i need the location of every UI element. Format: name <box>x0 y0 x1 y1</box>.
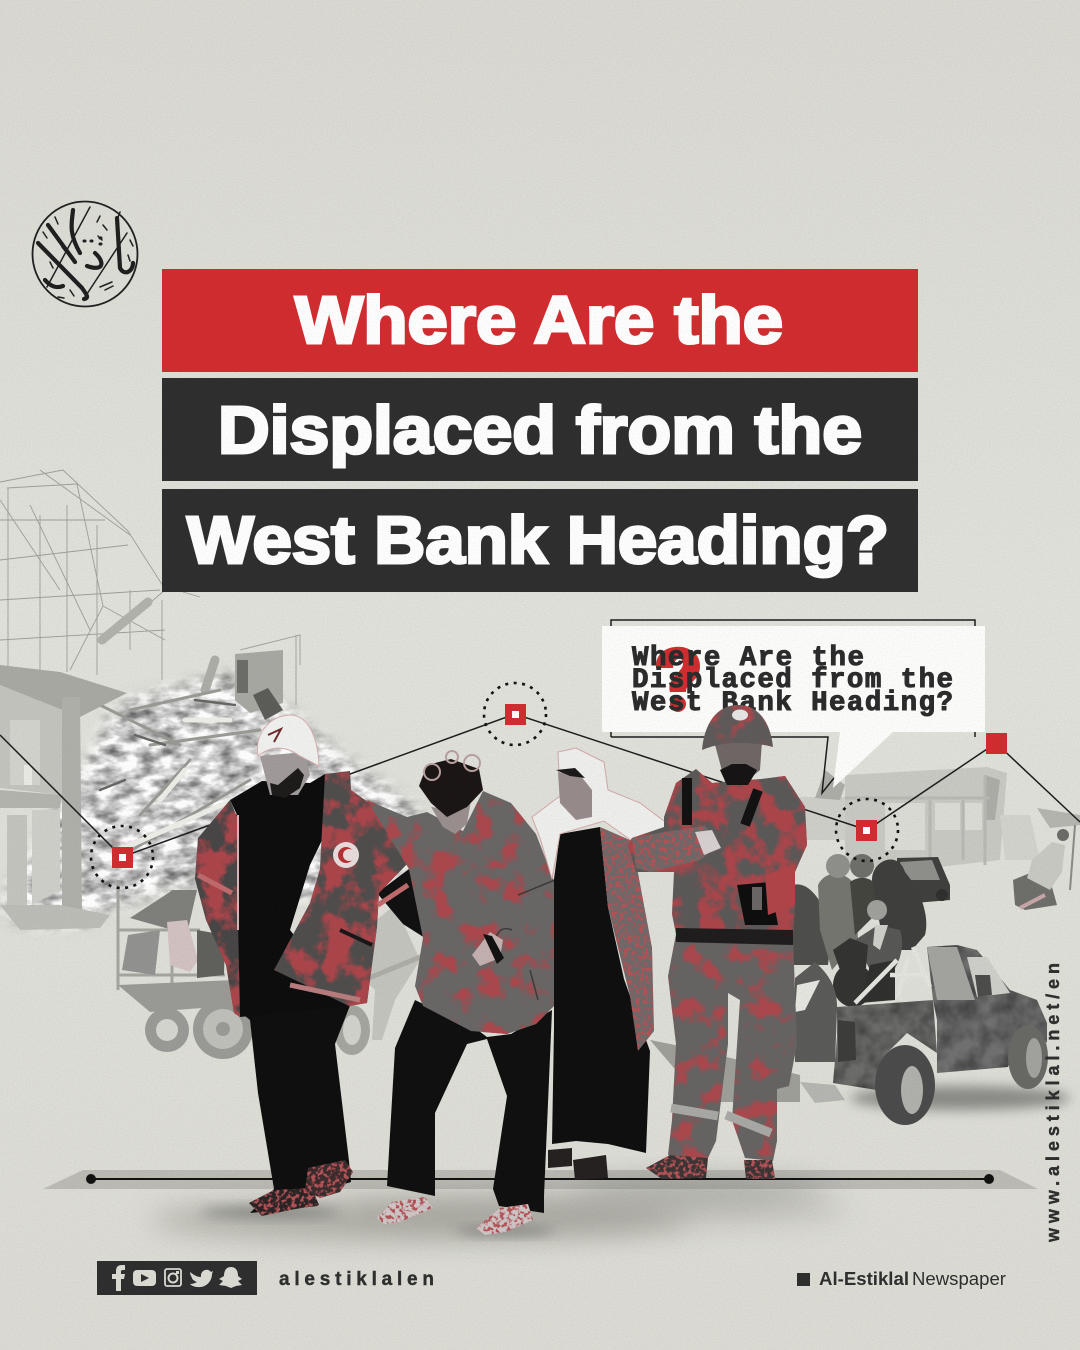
roll bar <box>860 960 895 1003</box>
crescent badge <box>333 842 359 868</box>
title line 3: West Bank Heading? <box>187 503 889 578</box>
node 2 <box>484 683 546 745</box>
ground platform <box>43 1170 1038 1189</box>
shoes <box>249 1160 353 1216</box>
logo: calligraphy roundel <box>32 202 138 306</box>
face <box>714 741 762 783</box>
title <box>162 269 918 592</box>
scaffolding <box>0 470 300 705</box>
speech bubble <box>602 620 985 793</box>
rubble mound <box>0 673 420 925</box>
background scene: buildings, right <box>800 767 1080 910</box>
soldier <box>818 874 858 970</box>
face <box>431 800 471 834</box>
newspaper credit <box>797 1269 1006 1289</box>
cap man and tyre <box>833 938 868 970</box>
tattered arm <box>632 826 720 872</box>
figure: relief worker in red crescent jacket <box>195 715 425 1216</box>
windows <box>927 947 975 1000</box>
shoes <box>548 1148 572 1168</box>
waistband <box>676 928 793 945</box>
fingers in hair <box>424 751 480 780</box>
background scene: cart and people, left <box>118 880 425 1059</box>
icon: twitter <box>190 1270 213 1287</box>
icon: youtube <box>133 1270 156 1286</box>
jacket <box>628 769 807 938</box>
hand <box>695 830 721 855</box>
trouser stripes <box>671 1108 771 1133</box>
vest straps and pocket <box>687 778 758 825</box>
dark inner layer <box>230 774 350 1017</box>
bubble body <box>602 626 985 788</box>
figure: paramedic in helmet and vest <box>628 705 807 1179</box>
cab <box>927 945 1047 1073</box>
title line 1 <box>162 269 918 372</box>
distant car <box>897 857 950 903</box>
helmet <box>702 705 773 750</box>
sleeve fold <box>495 880 555 1000</box>
trousers <box>668 934 797 1161</box>
beanie <box>257 715 319 766</box>
front wheel <box>875 1045 935 1125</box>
timeline baseline <box>86 1174 994 1184</box>
distant figures <box>1013 829 1069 910</box>
helmet badge <box>732 710 748 720</box>
shoes <box>377 1197 533 1235</box>
lower man <box>795 962 837 1062</box>
hair <box>419 759 483 817</box>
node 4 <box>986 733 1007 754</box>
jacket <box>195 771 409 1017</box>
network line chart <box>0 683 1080 888</box>
truck shadow <box>850 1086 1070 1110</box>
icon: instagram <box>165 1269 181 1286</box>
bubble text: Where Are the <box>632 643 864 674</box>
boy <box>855 925 902 970</box>
scarf <box>532 748 672 879</box>
title line 1: Where Are the <box>295 283 783 358</box>
icon: facebook <box>112 1265 125 1291</box>
young man <box>850 854 874 878</box>
bubble text: Displaced from the <box>632 665 953 696</box>
social media bar <box>97 1261 257 1295</box>
node 1 <box>91 826 153 888</box>
legs <box>240 1003 351 1213</box>
puffer jacket man <box>793 884 832 965</box>
title line 2: Displaced from the <box>218 393 862 468</box>
newspaper credit: Newspaper <box>912 1269 1006 1289</box>
red question mark <box>656 647 700 712</box>
dress <box>552 827 650 1153</box>
hooded figure <box>872 860 926 950</box>
title line 3 <box>162 489 918 592</box>
cardigan <box>600 827 654 1051</box>
rubble <box>650 1040 800 1102</box>
under arm <box>377 869 425 938</box>
bed <box>833 1000 937 1090</box>
rooftop hut <box>235 650 283 720</box>
fleece <box>367 791 560 1034</box>
bubble outline <box>611 620 975 793</box>
icon: snapchat <box>219 1267 242 1288</box>
social handle: alestiklalen <box>279 1269 434 1290</box>
face <box>558 772 592 820</box>
boots <box>646 1155 775 1179</box>
hand <box>472 932 503 966</box>
background scene: ruined buildings, left <box>0 470 420 930</box>
rear wheel <box>1008 1025 1048 1089</box>
figure: older woman in headscarf <box>532 748 672 1180</box>
node 3 <box>836 799 898 861</box>
trousers <box>387 1000 552 1213</box>
concrete slabs and columns <box>0 685 80 795</box>
face <box>260 752 310 795</box>
bubble text <box>632 643 953 719</box>
ground shadow <box>150 1180 850 1240</box>
leaning beams <box>90 602 260 860</box>
background scene: seated people, right <box>650 854 926 1103</box>
bubble text: West Bank Heading? <box>632 688 953 719</box>
website vertical text: www.alestiklal.net/en <box>1043 963 1063 1243</box>
jacket details <box>198 815 408 1000</box>
title line 2 <box>162 378 918 481</box>
figure: woman in red fleece <box>367 751 560 1235</box>
newspaper credit: Al-Estiklal <box>819 1269 909 1289</box>
background: pickup truck <box>833 945 1070 1125</box>
